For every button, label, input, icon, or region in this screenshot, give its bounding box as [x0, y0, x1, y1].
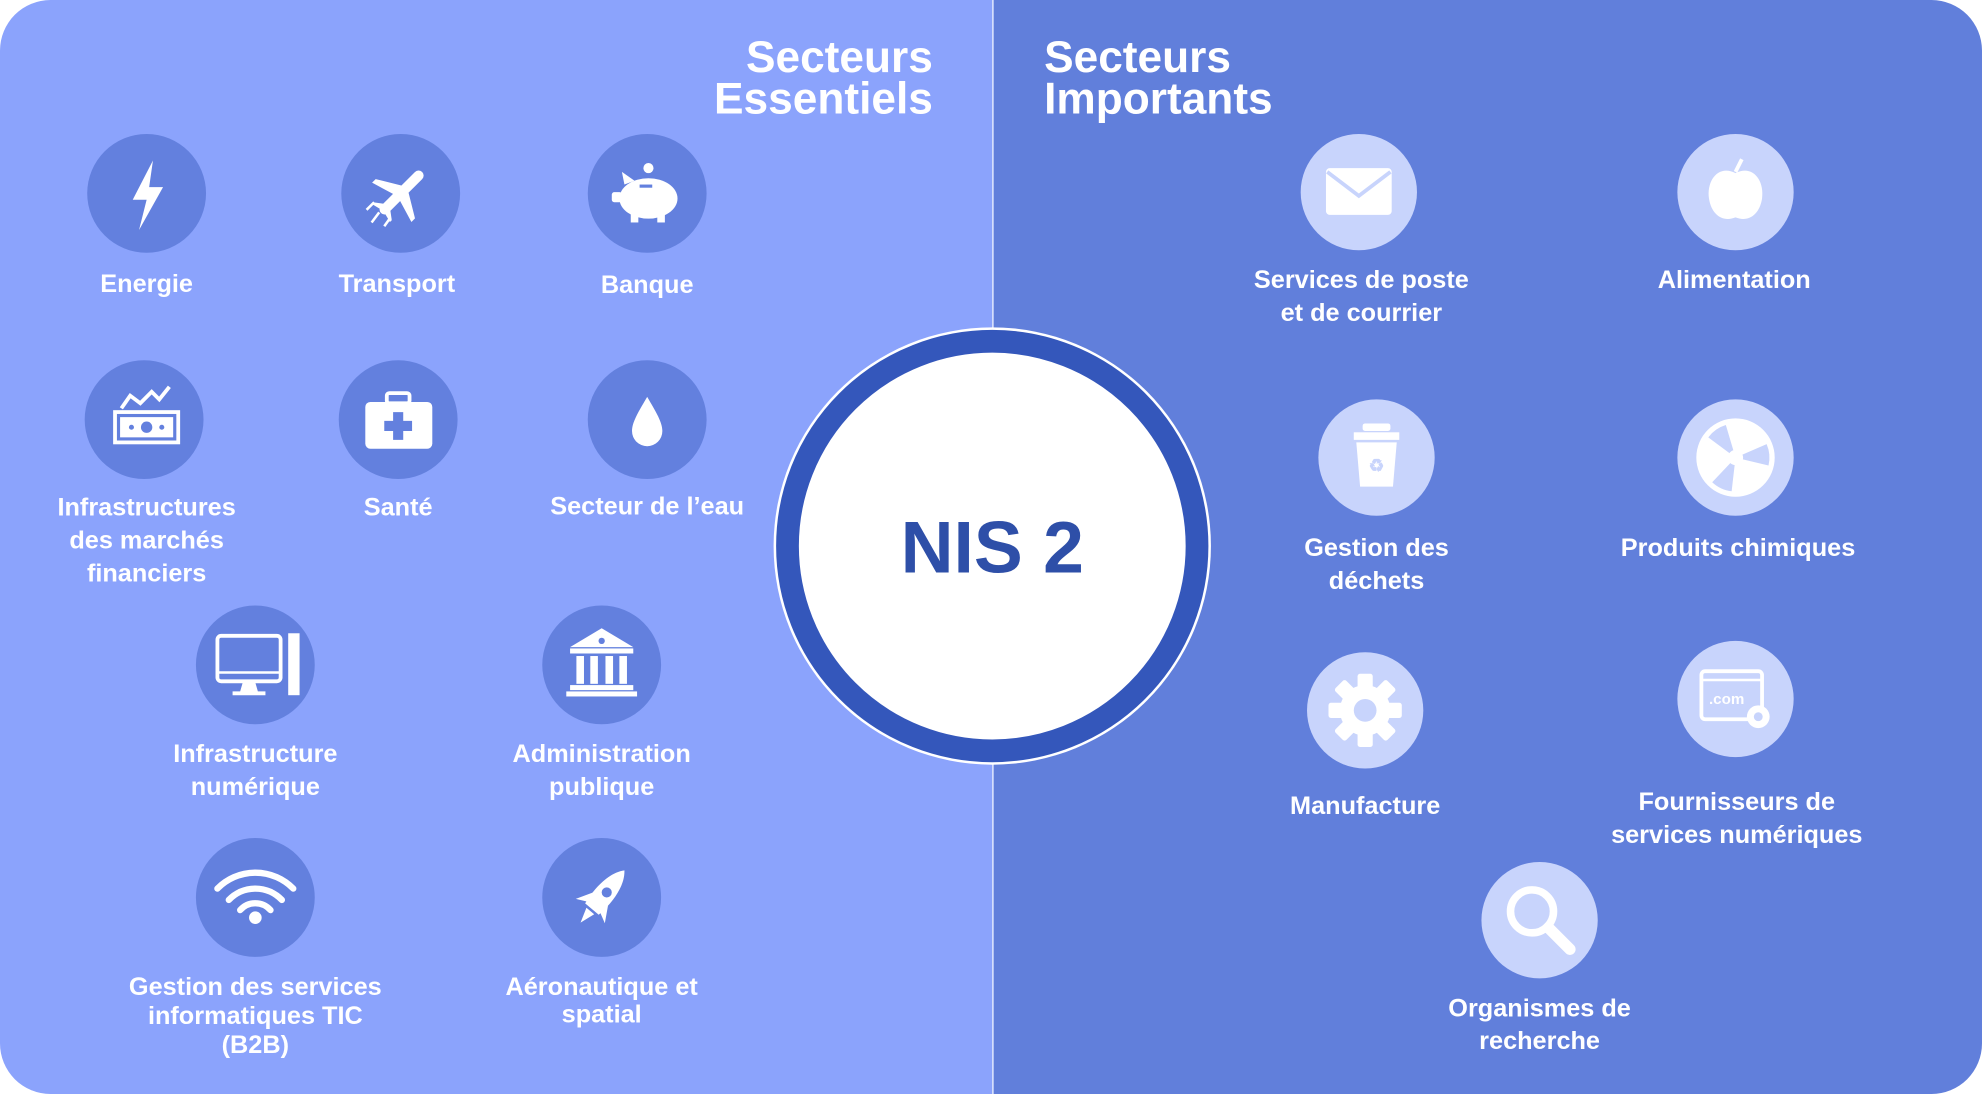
- item: Organismes de recherche: recherche: [1479, 1027, 1600, 1055]
- panel: importants background: [992, 0, 1982, 1094]
- item: Energie: Energie: [100, 270, 193, 298]
- item: Fournisseurs de services numériques: Fournisseurs de: [1638, 788, 1835, 816]
- item: Gestion des services informatiques TIC (B2B): informatiques TIC: [148, 1002, 363, 1030]
- item: Infrastructure numérique: numérique: [191, 773, 320, 801]
- item: Aéronautique et spatial: spatial: [562, 1001, 642, 1029]
- item: Gestion des services informatiques TIC (B2B): Gestion des services: [129, 973, 382, 1001]
- center: NIS 2 circle: [774, 327, 1211, 765]
- item: Gestion des déchets: [1304, 399, 1449, 595]
- item: Transport: Transport: [339, 270, 456, 298]
- item: Secteur de l'eau: Secteur de l’eau: [550, 492, 744, 520]
- item: Services de poste et de courrier: et de courrier: [1281, 299, 1442, 327]
- title: Secteurs Importants: Importants: [1044, 75, 1273, 124]
- item: Gestion des déchets: ♻: [1369, 455, 1384, 475]
- item: Aéronautique et spatial: [506, 838, 698, 1029]
- item: Infrastructures des marchés financiers: financiers: [87, 559, 206, 587]
- item: Infrastructures des marchés financiers: des marchés: [69, 527, 224, 555]
- item: Fournisseurs de services numériques: .com: [1709, 691, 1744, 708]
- title: Secteurs Importants: Secteurs: [1044, 33, 1231, 82]
- item: Banque: [588, 134, 707, 299]
- item: Secteur de l'eau: [550, 360, 744, 520]
- item: Administration publique: publique: [549, 773, 654, 801]
- item: Gestion des services informatiques TIC (B2B): [129, 838, 382, 1059]
- item: Manufacture: [1290, 652, 1440, 820]
- item: Organismes de recherche: Organismes de: [1448, 994, 1631, 1022]
- item: Banque: Banque: [601, 271, 694, 299]
- title: Secteurs Essentiels: Secteurs: [746, 33, 933, 82]
- item: Produits chimiques: [1621, 399, 1855, 562]
- item: Aéronautique et spatial: Aéronautique et: [506, 973, 698, 1001]
- center: NIS 2 circle: NIS 2: [901, 507, 1084, 589]
- item: Infrastructure numérique: [173, 605, 337, 801]
- item: Infrastructures des marchés financiers: [57, 360, 236, 587]
- item: Fournisseurs de services numériques: [1611, 641, 1862, 849]
- item: Santé: Santé: [364, 494, 433, 522]
- item: Services de poste et de courrier: Services de poste: [1254, 266, 1469, 294]
- item: Produits chimiques: Produits chimiques: [1621, 534, 1855, 562]
- title: Secteurs Essentiels: Essentiels: [714, 75, 933, 124]
- item: Organismes de recherche: [1448, 862, 1631, 1055]
- item: Services de poste et de courrier: [1254, 134, 1469, 327]
- title: Secteurs Importants: [1044, 33, 1273, 124]
- item: Santé: [339, 360, 458, 522]
- item: Alimentation: [1658, 134, 1811, 294]
- item: Administration publique: [513, 605, 691, 801]
- item: Infrastructures des marchés financiers: Infrastructures: [57, 494, 236, 522]
- item: Transport: [339, 134, 460, 298]
- item: Gestion des services informatiques TIC (B2B): (B2B): [222, 1031, 289, 1059]
- item: Gestion des déchets: Gestion des: [1304, 534, 1449, 562]
- title: Secteurs Essentiels: [714, 33, 933, 124]
- item: Manufacture: Manufacture: [1290, 792, 1440, 820]
- item: Gestion des déchets: déchets: [1329, 567, 1424, 595]
- item: Fournisseurs de services numériques: services numériques: [1611, 821, 1862, 849]
- item: Alimentation: Alimentation: [1658, 266, 1811, 294]
- item: Administration publique: Administration: [513, 740, 691, 768]
- item: Infrastructure numérique: Infrastructure: [173, 740, 337, 768]
- panel: essentiels background: [0, 0, 992, 1094]
- item: Energie: [87, 134, 206, 298]
